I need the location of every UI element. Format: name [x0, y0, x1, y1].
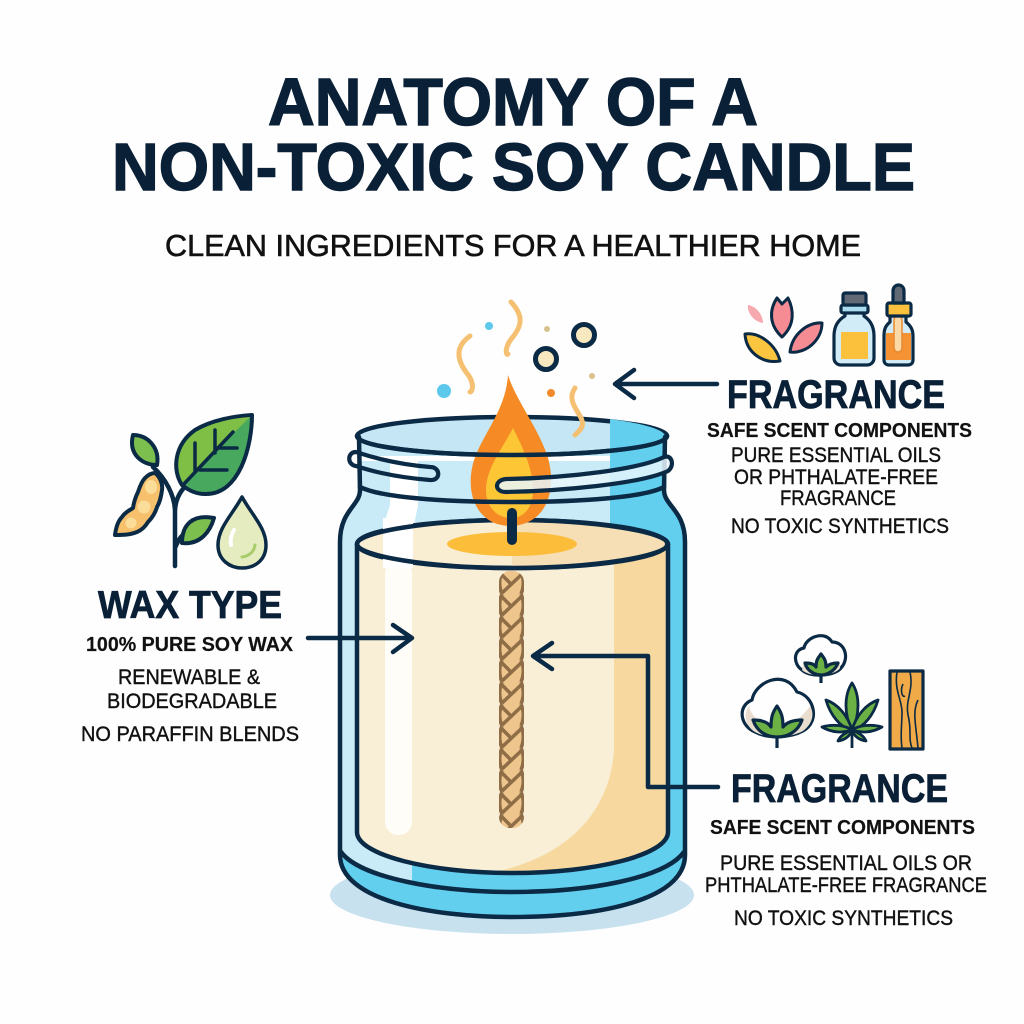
wax type text: 100% PURE SOY WAX [86, 634, 294, 656]
wax type text [81, 584, 299, 746]
glass body [342, 443, 683, 915]
right top text [707, 373, 972, 538]
flame [471, 375, 551, 526]
right bottom text: FRAGRANCE [731, 767, 948, 811]
icon: wood plank [890, 671, 923, 749]
jar outline [340, 436, 685, 917]
icon: small cotton [795, 636, 846, 683]
icon: dropper bottle [884, 285, 913, 365]
right top text: SAFE SCENT COMPONENTS [707, 420, 972, 442]
wax type text: BIODEGRADABLE [107, 690, 277, 713]
icon: soy plant [115, 415, 266, 568]
right top text: OR PHTHALATE-FREE [734, 466, 938, 489]
arrow: wax type to wax [308, 625, 412, 652]
right top text: FRAGRANCE [727, 373, 945, 417]
braided wick [499, 571, 524, 828]
left ring thread [349, 452, 438, 480]
title: NON-TOXIC SOY CANDLE [112, 130, 915, 205]
soy pod [115, 473, 162, 535]
title: ANATOMY OF A [268, 65, 758, 140]
title [112, 65, 915, 205]
wax top surface [357, 520, 667, 568]
icon: hemp leaf [822, 683, 882, 748]
wax type text: RENEWABLE & [118, 666, 260, 689]
candle jar [330, 375, 700, 930]
icon: essential oil bottle [834, 293, 874, 365]
left leaf [132, 435, 157, 465]
right bottom text: NO TOXIC SYNTHETICS [734, 907, 953, 930]
right bottom text: SAFE SCENT COMPONENTS [710, 817, 975, 839]
arrow: fragrance to scent [615, 370, 717, 398]
icon: petals [745, 298, 822, 361]
wick top [507, 508, 517, 545]
right bottom text: PURE ESSENTIAL OILS OR [720, 852, 972, 875]
jar shadow [330, 856, 694, 934]
subtitle: CLEAN INGREDIENTS FOR A HEALTHIER HOME [165, 228, 861, 263]
right bottom text: PHTHALATE-FREE FRAGRANCE [705, 874, 987, 897]
icon: large cotton [742, 679, 813, 748]
melt pool [447, 532, 577, 556]
right ring thread [497, 457, 672, 492]
right bottom text [705, 767, 987, 930]
right top text: FRAGRANCE [780, 487, 896, 510]
wax body [357, 518, 680, 880]
scent particles [437, 302, 595, 435]
large leaf [176, 415, 252, 494]
small leaf [182, 517, 214, 543]
right top text: NO TOXIC SYNTHETICS [731, 515, 949, 538]
wax type text: NO PARAFFIN BLENDS [81, 723, 299, 746]
back rim opening [357, 417, 667, 455]
arrow: wick callout to wick [533, 643, 718, 787]
right top text: PURE ESSENTIAL OILS [731, 444, 941, 467]
oil drop [218, 497, 266, 568]
wax type text: WAX TYPE [98, 584, 282, 627]
